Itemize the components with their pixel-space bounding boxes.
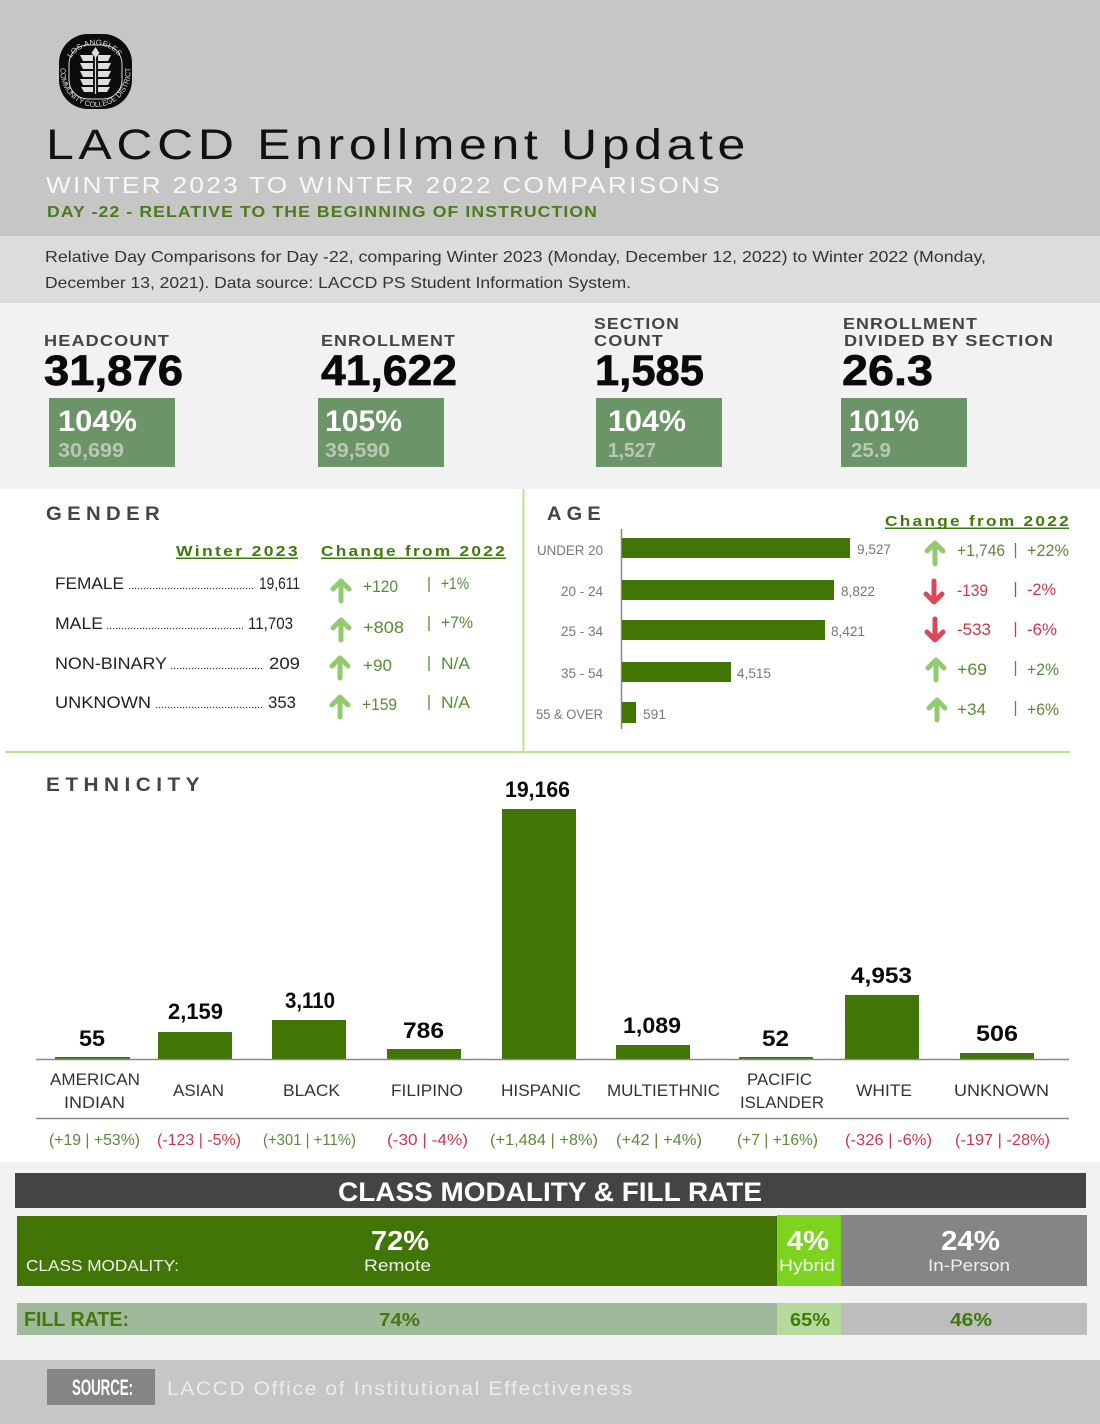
category labels: AMERICAN: [50, 1070, 140, 1089]
metric: section count: 104%: [608, 405, 686, 438]
row: 20-24 change: -139: [957, 582, 988, 600]
category labels: ASIAN: [173, 1081, 224, 1100]
row: under 20 change: +1,746: [957, 542, 1005, 560]
metric: enrollment divided by section: 26.3: [842, 347, 933, 395]
row: 25-34 change: -533: [957, 621, 991, 639]
bar chart: ethnicity: 52: [762, 1026, 789, 1051]
metric: enrollment: ENROLLMENT: [321, 333, 456, 350]
class modality bar: Remote: [364, 1256, 431, 1275]
change labels: (+42 | +4%): [616, 1132, 702, 1149]
metric: enrollment: [318, 333, 457, 467]
class modality bar: 72%: [371, 1225, 429, 1256]
section title bar: [15, 1173, 1086, 1208]
row: male: +808: [363, 619, 404, 637]
class modality bar: 4%: [787, 1225, 829, 1256]
metric: section count: COUNT: [594, 333, 664, 350]
row: male: [55, 614, 473, 640]
bar chart: ethnicity: 2,159: [168, 999, 223, 1024]
row: female: +1%: [441, 575, 469, 593]
fill rate bar: [17, 1303, 1087, 1335]
panel: age: [536, 504, 1071, 729]
row: female: [55, 574, 469, 601]
change labels: (+7 | +16%): [737, 1132, 818, 1149]
bar chart: age: 55 & OVER: [536, 707, 603, 722]
row: 20-24 change: -2%: [1027, 581, 1056, 599]
category labels: FILIPINO: [391, 1081, 463, 1100]
row: unknown: N/A: [441, 694, 470, 712]
icon: LACCD seal: COMMUNITY COLLEGE DISTRICT: [60, 68, 130, 107]
change labels: (-123 | -5%): [157, 1132, 241, 1149]
row: male: +7%: [441, 614, 473, 632]
metric: enrollment: 105%: [325, 405, 402, 438]
category labels: PACIFIC: [747, 1070, 812, 1089]
bar chart: age: 9,527: [857, 542, 891, 557]
row: 35-54 change: [928, 660, 1059, 680]
change labels: [49, 1132, 1050, 1149]
metric: section count: 1,585: [595, 347, 704, 395]
panel: header: [0, 0, 1100, 236]
row: under 20 change: [927, 542, 1069, 564]
category labels: ISLANDER: [740, 1093, 824, 1112]
bar chart: ethnicity: 506: [976, 1021, 1018, 1046]
panel: ethnicity: [36, 775, 1069, 1149]
panel: source footer: [0, 1360, 1100, 1424]
bar chart: age: 20 - 24: [561, 584, 603, 599]
metric: headcount: 30,699: [58, 440, 124, 462]
panel: description: December 13, 2021). Data source: LACCD PS Student Information System.: [45, 275, 631, 292]
metric: enrollment divided by section: 25.9: [851, 440, 891, 462]
metric: headcount: 31,876: [44, 347, 183, 395]
row: 55 and over change: [929, 700, 1059, 720]
metric: enrollment divided by section: [841, 316, 1054, 467]
class modality bar: Hybrid: [779, 1256, 835, 1275]
class modality bar: CLASS MODALITY:: [26, 1258, 179, 1275]
row: 35-54 change: +69: [957, 661, 987, 679]
bar chart: age: [536, 529, 891, 729]
category labels: BLACK: [283, 1081, 341, 1100]
metric: headcount: [44, 333, 183, 467]
section title bar: CLASS MODALITY & FILL RATE: [338, 1177, 762, 1207]
class modality bar: In-Person: [928, 1256, 1010, 1275]
column header: winter 2023: Winter 2023: [176, 543, 300, 560]
source tag: SOURCE:: [72, 1375, 133, 1400]
metric: section count: [594, 316, 722, 467]
subtitle: WINTER 2023 TO WINTER 2022 COMPARISONS: [46, 172, 722, 198]
row: female: 19,611: [259, 574, 300, 593]
row: unknown: 353: [268, 693, 296, 712]
class modality bar: 24%: [941, 1225, 1000, 1256]
change labels: (+19 | +53%): [49, 1132, 140, 1149]
row: non-binary: NON-BINARY: [55, 654, 167, 673]
category labels: INDIAN: [64, 1093, 125, 1112]
bar chart: age: 591: [643, 707, 666, 722]
metric: headcount: HEADCOUNT: [44, 333, 170, 350]
bar chart: ethnicity: 786: [403, 1018, 444, 1043]
row: unknown: [55, 693, 470, 717]
row: male: 11,703: [248, 614, 293, 633]
panel: description: [0, 236, 1100, 303]
row: 25-34 change: -6%: [1027, 621, 1057, 639]
bar chart: ethnicity: [36, 777, 1069, 1060]
change labels: (-30 | -4%): [387, 1132, 468, 1149]
metric: enrollment divided by section: 101%: [849, 405, 919, 438]
bar chart: age: 8,421: [831, 624, 865, 639]
row: non-binary: +90: [363, 657, 392, 675]
row: non-binary: 209: [269, 654, 300, 673]
fill rate bar: 65%: [790, 1310, 830, 1330]
bar chart: ethnicity: 1,089: [623, 1013, 681, 1038]
change labels: (+301 | +11%): [263, 1132, 356, 1149]
row: 35-54 change: +2%: [1027, 661, 1059, 679]
row: female: +120: [363, 578, 398, 596]
bar chart: ethnicity: 3,110: [285, 988, 335, 1013]
day label: DAY -22 - RELATIVE TO THE BEGINNING OF INSTRUCTION: [47, 204, 598, 221]
bar chart: age: UNDER 20: [537, 543, 603, 558]
icon: LACCD seal: [59, 34, 132, 109]
change labels: (+1,484 | +8%): [490, 1132, 598, 1149]
metric: enrollment divided by section: ENROLLMENT: [843, 316, 978, 333]
change labels: (-197 | -28%): [955, 1132, 1050, 1149]
metric: headcount: 104%: [58, 405, 137, 438]
row: under 20 change: +22%: [1027, 542, 1069, 560]
source text: LACCD Office of Institutional Effectiveness: [167, 1379, 634, 1400]
category labels: HISPANIC: [501, 1081, 581, 1100]
category labels: UNKNOWN: [954, 1081, 1049, 1100]
row: 55 and over change: +6%: [1027, 701, 1059, 719]
fill rate bar: FILL RATE:: [24, 1309, 129, 1331]
metric: section count: SECTION: [594, 316, 680, 333]
panel: description: Relative Day Comparisons for Day -22, comparing Winter 2023 (Monday, December 12, 2022) to Winter 2022 (Monday,: [45, 249, 986, 266]
change labels: (-326 | -6%): [845, 1132, 932, 1149]
panel: key metrics: [0, 303, 1100, 489]
metric: section count: 1,527: [608, 440, 656, 462]
heading: gender: GENDER: [46, 504, 165, 525]
class modality bar: [17, 1215, 1087, 1286]
bar chart: ethnicity: 4,953: [851, 963, 912, 988]
row: unknown: UNKNOWN: [55, 693, 151, 712]
bar chart: age: 8,822: [841, 584, 875, 599]
fill rate bar: 46%: [950, 1310, 992, 1330]
row: unknown: +159: [362, 696, 397, 714]
category labels: WHITE: [856, 1081, 912, 1100]
category labels: [50, 1070, 1049, 1112]
column header: change from 2022: Change from 2022: [885, 513, 1071, 530]
title: LACCD Enrollment Update: [46, 121, 750, 169]
panel: class modality and fill rate: [0, 1162, 1100, 1360]
bar chart: ethnicity: 55: [79, 1026, 105, 1051]
bar chart: age: 4,515: [737, 666, 771, 681]
row: female: FEMALE: [55, 574, 124, 593]
row: 55 and over change: +34: [957, 701, 986, 719]
row: non-binary: N/A: [441, 655, 470, 673]
heading: ethnicity: ETHNICITY: [46, 775, 205, 796]
row: non-binary: [55, 654, 470, 678]
heading: age: AGE: [547, 504, 606, 525]
source tag: [47, 1369, 155, 1405]
panel: gender: [46, 504, 507, 717]
bar chart: age: 25 - 34: [561, 624, 603, 639]
row: 25-34 change: [927, 619, 1057, 640]
category labels: MULTIETHNIC: [607, 1081, 720, 1100]
row: male: MALE: [55, 614, 103, 633]
fill rate bar: 74%: [379, 1310, 420, 1330]
row: 20-24 change: [926, 581, 1056, 602]
metric: enrollment: 41,622: [321, 347, 457, 395]
bar chart: age: 35 - 54: [561, 666, 603, 681]
bar chart: ethnicity: 19,166: [505, 777, 570, 802]
icon: LACCD seal: LOS ANGELES: [67, 40, 122, 58]
column header: change from 2022: Change from 2022: [321, 543, 507, 560]
metric: enrollment: 39,590: [325, 440, 390, 462]
metric: enrollment divided by section: DIVIDED BY SECTION: [844, 333, 1054, 350]
